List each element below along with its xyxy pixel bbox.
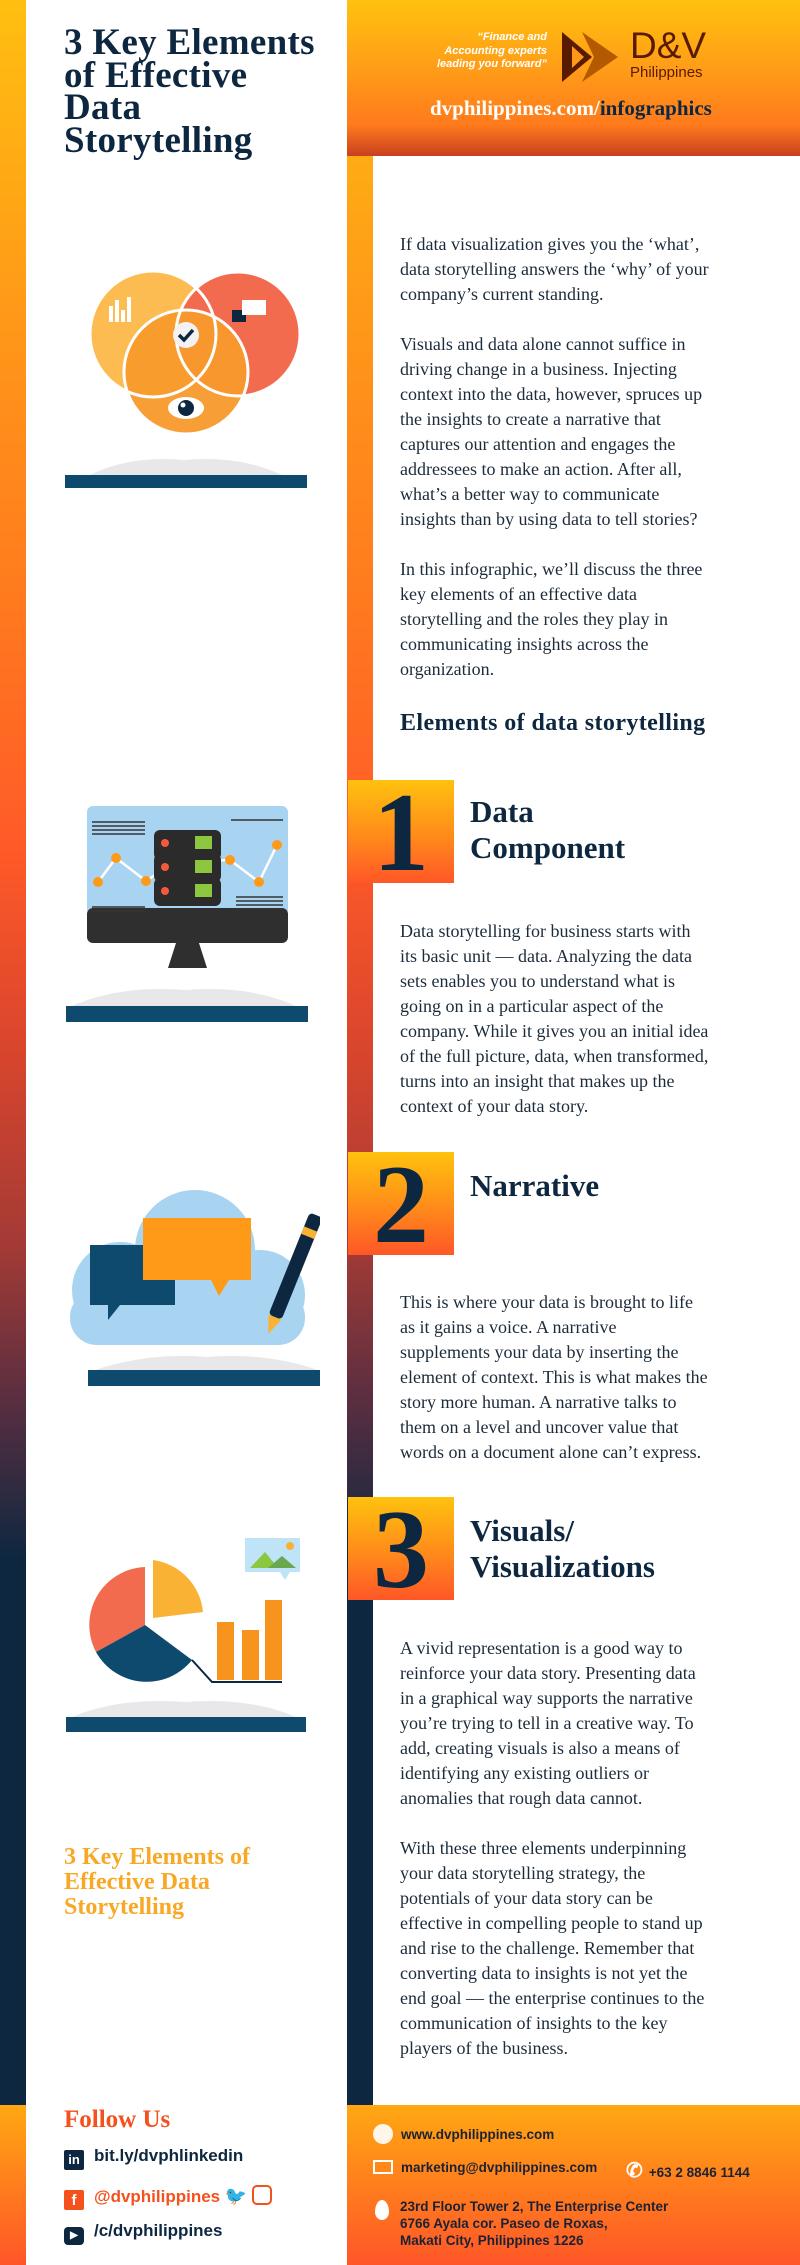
text: visuals: potentials of your data story can be (400, 1888, 653, 1908)
header orange band (347, 0, 800, 156)
intro text: company’s current standing. (400, 284, 603, 304)
book (90, 459, 282, 475)
number 1: 1 (373, 771, 429, 895)
text: data component (400, 921, 708, 1116)
brand: D&V (630, 25, 706, 66)
heading: data component: Data (470, 794, 534, 829)
book (72, 1701, 296, 1717)
text: data component: its basic unit — data. Analyzing the data (400, 946, 692, 966)
email: marketing@dvphilippines.com (401, 2160, 597, 2175)
intro text: data storytelling answers the ‘why’ of your (400, 259, 709, 279)
title: Data (64, 87, 141, 128)
number 1 (348, 780, 454, 883)
title: of Effective (64, 54, 247, 96)
intro text: organization. (400, 659, 494, 679)
heading: narrative: Narrative (470, 1168, 599, 1203)
number 3: 3 (373, 1488, 429, 1612)
intro text: the insights to create a narrative that (400, 409, 661, 429)
text: narrative: story more human. A narrative talks to (400, 1392, 676, 1412)
follow us heading: Follow Us (64, 2106, 170, 2133)
youtube (64, 2221, 222, 2245)
address (375, 2199, 668, 2248)
tagline: “Finance and Accounting experts leading you forward” (437, 31, 547, 70)
facebook (64, 2185, 272, 2210)
text: visuals: anomalies that rough data cannot. (400, 1788, 642, 1808)
text: data component: company. While it gives you an initial idea (400, 1021, 708, 1041)
phone: ✆ +63 2 8846 1144 (626, 2160, 750, 2182)
intro text: driving change in a business. Injecting (400, 359, 677, 379)
text: visuals: end goal — the enterprise continues to the (400, 1988, 704, 2008)
text: visuals: your data storytelling strategy, the (400, 1863, 645, 1883)
text: visuals: players of the business. (400, 2038, 568, 2058)
intro text: what’s a better way to communicate (400, 484, 659, 504)
facebook: f (72, 2192, 76, 2209)
linkedin: in (68, 2152, 80, 2167)
text: visuals: in a graphical way supports the narrative (400, 1688, 693, 1708)
heading: visuals: Visuals/ (470, 1513, 574, 1548)
intro text: captures our attention and engages the (400, 434, 675, 454)
number 3 (348, 1497, 454, 1600)
intro text: In this infographic, we’ll discuss the three (400, 559, 702, 579)
middle gradient strip (347, 0, 373, 2105)
text: visuals: and rise to the challenge. Remember that (400, 1938, 694, 1958)
linkedin: bit.ly/dvphlinkedin (94, 2146, 243, 2165)
left gradient strip (0, 0, 26, 2105)
text: narrative: words on a document alone can’t express. (400, 1442, 701, 1462)
text: visuals: converting data to insights is not yet the (400, 1963, 687, 1983)
heading: visuals (470, 1513, 655, 1584)
intro text: storytelling and the roles they play in (400, 609, 668, 629)
intro text: Visuals and data alone cannot suffice in (400, 334, 686, 354)
text: visuals: reinforce your data story. Presenting data (400, 1663, 696, 1683)
intro text (400, 234, 709, 679)
logo mark (562, 32, 618, 82)
intro text: context into the data, however, spruces up (400, 384, 702, 404)
book (72, 989, 296, 1006)
youtube: /c/dvphilippines (94, 2221, 222, 2240)
text: data component: turns into an insight that makes up the (400, 1071, 674, 1091)
heading: visuals: Visualizations (470, 1549, 655, 1584)
youtube: ▶ (70, 2230, 78, 2241)
address: 23rd Floor Tower 2, The Enterprise Center (400, 2199, 668, 2214)
heading: data component: Component (470, 830, 625, 865)
text: data component: going on in a particular aspect of the (400, 996, 663, 1016)
number 2: 2 (373, 1143, 429, 1267)
linkedin (64, 2146, 243, 2170)
text: data component: Data storytelling for business starts with (400, 921, 690, 941)
text: visuals: communication of insights to the key (400, 2013, 667, 2033)
title: 3 Key Elements (64, 22, 315, 63)
text: narrative: them on a level and uncover value that (400, 1417, 678, 1437)
header url: dvphilippines.com/infographics (430, 96, 712, 120)
icon: venn (65, 272, 307, 488)
address: 6766 Ayala cor. Paseo de Roxas, (400, 2216, 608, 2231)
text: visuals: add, creating visuals is also a means of (400, 1738, 680, 1758)
text: narrative (400, 1292, 708, 1462)
text: visuals: effective in compelling people to stand up (400, 1913, 703, 1933)
text: narrative: element of context. This is what makes the (400, 1367, 708, 1387)
text: visuals: A vivid representation is a good way to (400, 1638, 682, 1658)
intro text: communicating insights across the (400, 634, 648, 654)
side title: Storytelling (64, 1894, 184, 1920)
intro text: addressees to make an action. After all, (400, 459, 682, 479)
intro text: If data visualization gives you the ‘what’, (400, 234, 699, 254)
icon: visuals (66, 1538, 306, 1732)
footer white left box (26, 2080, 347, 2265)
facebook: @dvphilippines 🐦 (94, 2186, 247, 2206)
side title (64, 1844, 250, 1920)
icon: narrative cloud (70, 1190, 320, 1386)
footer band (0, 2105, 800, 2265)
text: narrative: supplements your data by inserting the (400, 1342, 678, 1362)
intro text: key elements of an effective data (400, 584, 637, 604)
footer contacts (373, 2124, 750, 2248)
logo block: Philippines (630, 64, 703, 81)
intro text: insights than by using data to tell stories? (400, 509, 697, 529)
title: Storytelling (64, 120, 253, 160)
heading: data component (470, 794, 625, 865)
side title: 3 Key Elements of (64, 1844, 250, 1870)
text: data component: context of your data story. (400, 1096, 588, 1116)
text: visuals: identifying any existing outliers or (400, 1763, 649, 1783)
icon: monitor with server (66, 806, 308, 1022)
title (64, 22, 315, 160)
text: data component: of the full picture, data, when transformed, (400, 1046, 708, 1066)
text: narrative: as it gains a voice. A narrative (400, 1317, 616, 1337)
book (95, 1356, 318, 1370)
heading: elements: Elements of data storytelling (400, 710, 706, 736)
logo block (437, 25, 706, 82)
text: visuals: With these three elements underpinning (400, 1838, 686, 1858)
text: narrative: This is where your data is brought to life (400, 1292, 693, 1312)
text: data component: sets enables you to understand what is (400, 971, 675, 991)
side title: Effective Data (64, 1869, 210, 1895)
number 2 (348, 1152, 454, 1255)
text: visuals: you’re trying to tell in a creative way. To (400, 1713, 694, 1733)
web (373, 2124, 554, 2144)
address: Makati City, Philippines 1226 (400, 2233, 584, 2248)
web: www.dvphilippines.com (401, 2127, 554, 2142)
text: visuals (400, 1638, 704, 2058)
